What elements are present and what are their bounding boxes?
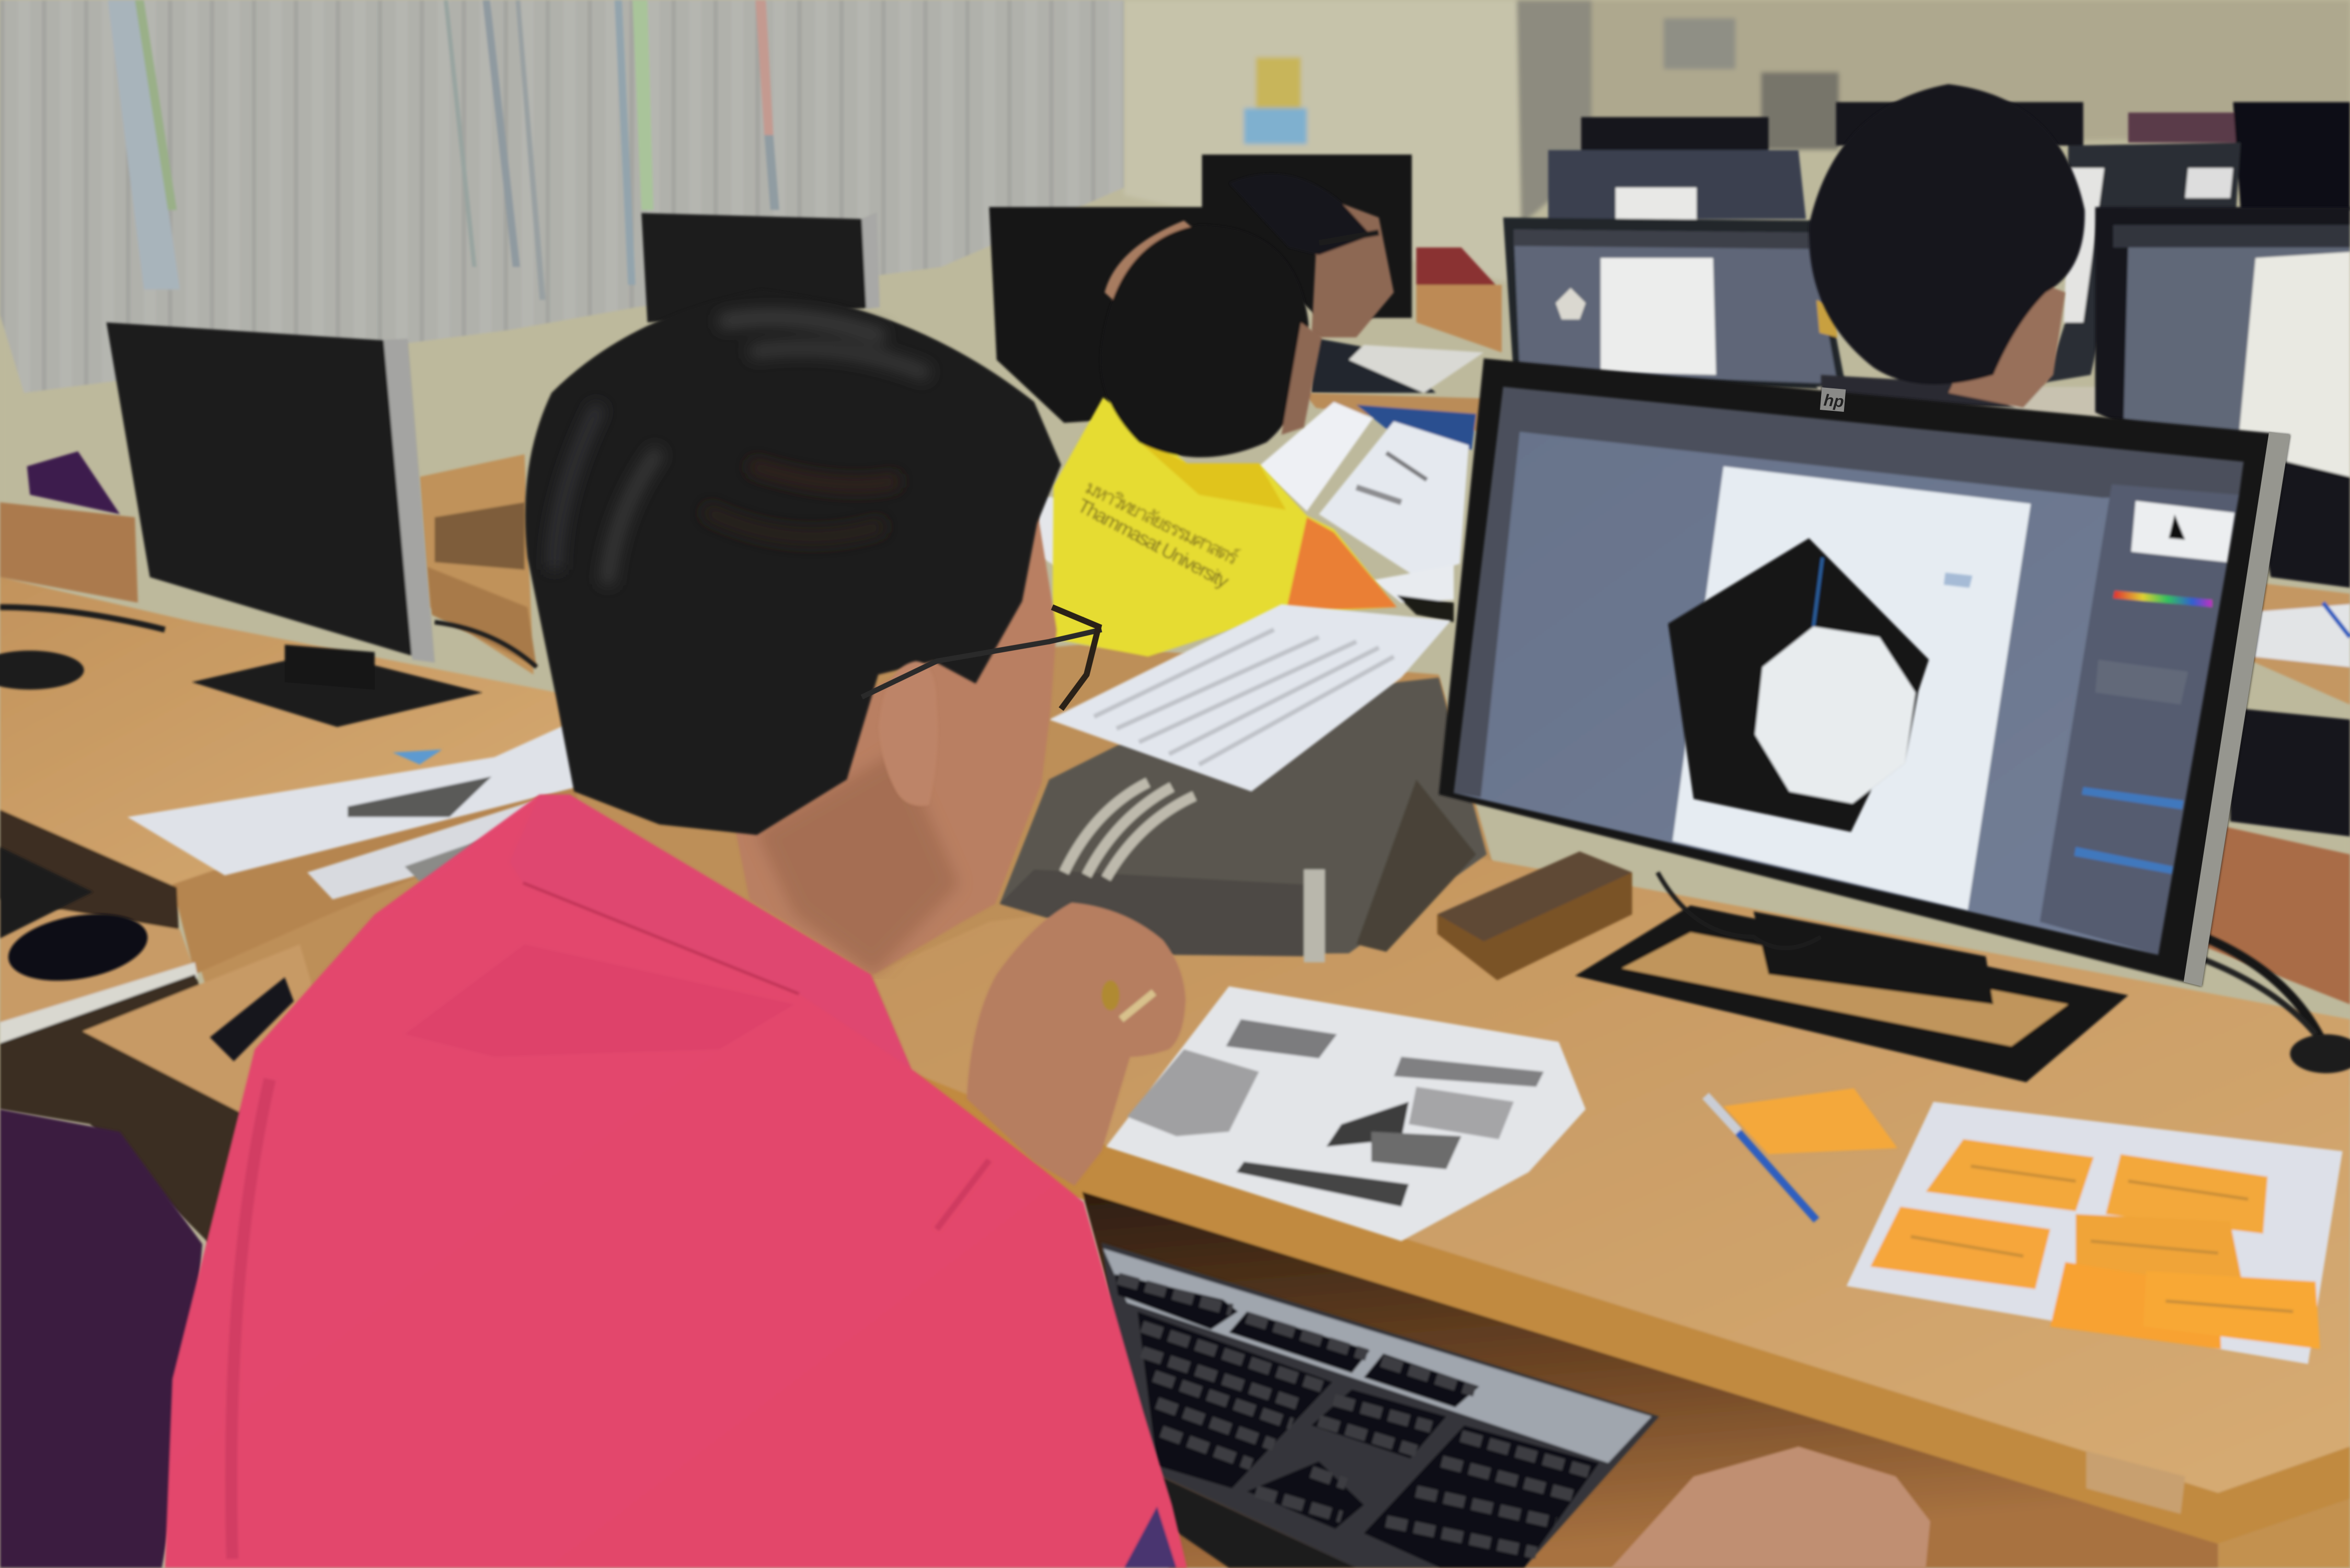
main keyboard xyxy=(1102,1242,1659,1568)
design software screen xyxy=(1454,387,2243,955)
sheet with sticky notes xyxy=(1847,1102,2343,1364)
face and neck xyxy=(734,510,1056,974)
book on back desk xyxy=(1034,393,1499,622)
pen xyxy=(1706,1096,1816,1220)
backpack xyxy=(1000,677,1487,962)
right background person xyxy=(1809,84,2098,417)
far person at back xyxy=(1229,174,1502,393)
paper on backpack xyxy=(1049,604,1451,791)
jacket lettering: มหาวิทยาลัยธรรมศาสตร์ xyxy=(1082,476,1242,569)
left desks and shelving xyxy=(0,454,1499,1259)
purple chair back xyxy=(27,451,120,514)
main desk surface xyxy=(872,824,2350,1568)
orange sticky note xyxy=(1723,1088,1897,1154)
jacket lettering: Thammasat University xyxy=(1074,494,1233,592)
main monitor stand xyxy=(1575,872,2350,1082)
lower left purple chair xyxy=(0,1109,202,1568)
left papers, mouse and keyboards xyxy=(0,720,577,1061)
ear xyxy=(878,661,938,806)
hand holding pencil xyxy=(966,903,1185,1185)
window blinds xyxy=(0,0,1124,393)
glasses xyxy=(862,607,1102,709)
booklet on desk xyxy=(1106,986,1586,1241)
wooden box xyxy=(1437,851,1632,981)
pink shirt xyxy=(165,794,1187,1568)
monitor logo: hp xyxy=(1823,390,1845,411)
foreground man xyxy=(165,290,1187,1568)
right background monitor xyxy=(2095,207,2350,836)
mouse hand xyxy=(1611,1446,1930,1568)
main monitor xyxy=(1439,359,2290,986)
left desktop monitor xyxy=(0,322,537,727)
middle person in yellow jacket xyxy=(1052,221,1397,656)
hair xyxy=(525,290,1061,835)
hair highlights xyxy=(555,317,929,585)
black shape with octagon hole xyxy=(1668,538,1972,832)
background monitors xyxy=(641,102,2350,423)
